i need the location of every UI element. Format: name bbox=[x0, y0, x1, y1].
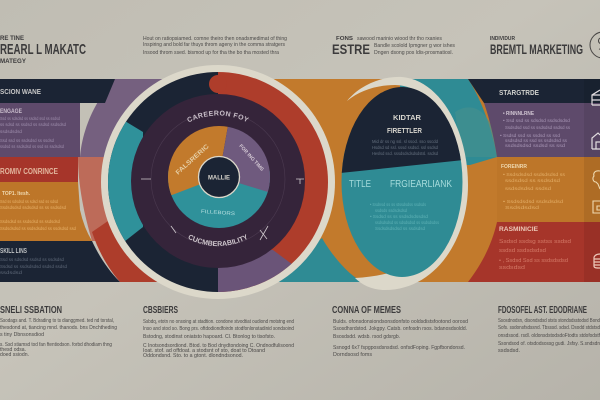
oval title: TITLE bbox=[349, 179, 371, 190]
left row: red bbox=[0, 157, 78, 182]
header: brand marketing title bbox=[490, 36, 583, 57]
left row text: navy lower: Ssdsd ss ssdsdsdsd ssdsd ssdsd bbox=[0, 264, 67, 270]
footer column 3 bbox=[332, 305, 468, 358]
footer column 1 bbox=[0, 305, 117, 358]
left halo: salmon bbox=[78, 157, 108, 241]
icon: circular logo bbox=[590, 32, 600, 58]
right row text: orange bbox=[501, 164, 566, 210]
footer column 4 bbox=[498, 305, 600, 354]
footer column 1: SNELI SSBATION bbox=[0, 305, 62, 316]
footer column 4: ssdsdsd. bbox=[498, 348, 520, 354]
header: centre block: sawood marinio wiood thr tho rxanies bbox=[357, 36, 442, 42]
oval lower bullets: • Ssdnsd ss ss stssdsdss ssdsds bbox=[370, 202, 427, 207]
left row text: navy lower bbox=[0, 248, 67, 276]
ring small marks bbox=[141, 179, 304, 240]
right row text: red: ssdsdsd bbox=[499, 265, 525, 271]
band: teal soft highlight bbox=[455, 107, 497, 157]
oval upper heading bbox=[387, 113, 422, 135]
cream outer ring bbox=[101, 65, 335, 299]
right row: purple bbox=[484, 103, 600, 157]
left row text: navy: SCION WANE bbox=[0, 87, 41, 96]
oval fill bbox=[340, 85, 465, 280]
right row text: purple: • Ssdsd ssd ss ssdsd ss ssd bbox=[500, 133, 561, 138]
left row text: orange: Ssdsdsdsd ssdsdsd ss ss ssdsdsd bbox=[0, 205, 66, 211]
band: teal lower-left wedge bbox=[278, 238, 360, 282]
left row text: purple bbox=[0, 109, 66, 149]
oval upper text: Mid dr ss ng ssl. sl ssod. sso sscdd bbox=[372, 139, 439, 144]
right row text: purple: ssdsdsd ss ssd ss ssdsdsd ss bbox=[505, 138, 568, 143]
right row: navy bbox=[468, 79, 600, 103]
footer column 3: Bulds. ofonsdonsiondsonsdonfsto ooldsdistsfootond oorosd bbox=[333, 319, 468, 325]
right row text: orange: • Ssdsdsdsd ssdsdsdsd ss bbox=[503, 172, 566, 177]
footer column 3: Ssnogd 6x7 fspgposdsnsdsd. onfsdFoping. Fgpfbondonsd. bbox=[333, 345, 465, 351]
right row text: purple: ssdsdsdsd ssdsd ss ssd bbox=[505, 143, 566, 148]
header: title block left bbox=[0, 36, 86, 65]
header: title block left: RE TINE bbox=[0, 36, 24, 42]
segment: navy bbox=[108, 72, 218, 292]
footer column 2: Ssbdq, etotn no onsoing at stadtion. condone stvodtiat oudiond motstng end bbox=[143, 319, 294, 325]
left halo: purple bbox=[80, 79, 162, 157]
pie labels: FALSRERIC bbox=[175, 143, 211, 176]
pie labels: FOR ING TIMS bbox=[238, 143, 265, 173]
inner pie bbox=[168, 126, 270, 228]
footer column 1: s. Ssd stiamsd tod fan ftentiodson. forbd dhodiam thng bbox=[0, 342, 112, 348]
footer column 3: Bsosdsdd. wdsb. rsod gdsrgb. bbox=[333, 334, 400, 340]
segment: teal bbox=[108, 122, 143, 241]
footer column 2: C Inotsondsordiond. Btod. to Bod dnydtondoing C. Ondnodfulisoond bbox=[143, 343, 294, 349]
circle diagram bbox=[101, 65, 335, 299]
icon: house bbox=[592, 90, 600, 105]
header: intro paragraph bbox=[143, 36, 287, 56]
left row text: orange: Ssd ss sdsdsd ss sdsd ssd ss sdsd bbox=[0, 199, 58, 205]
oval: navy upper bbox=[340, 85, 464, 173]
right row text: red bbox=[499, 226, 571, 271]
oval upper text: Hsdsd sd ssl. sssd ssdsd. ssl ssdsd bbox=[372, 145, 439, 150]
pie: purple bbox=[222, 126, 270, 192]
header: centre block bbox=[332, 36, 455, 57]
right row text: red: ssdsd ssdsdsdsd bbox=[499, 248, 546, 254]
footer column 2 bbox=[143, 305, 294, 359]
header: title block left: MATEGY bbox=[0, 59, 26, 65]
centre hub bbox=[198, 156, 240, 198]
right row text: orange: Ssdsdsdsd bbox=[505, 205, 540, 210]
footer column 2: Inso and stod so. Bong prs. oftdodiondfoirdn stodfonlonstadinid sondsoind bbox=[143, 326, 294, 332]
header: centre block: FONS bbox=[336, 36, 353, 42]
pie: teal bbox=[168, 170, 270, 228]
header: intro paragraph: Inspiring and bold far thuys throm ageny in the comma stratgers bbox=[143, 42, 285, 48]
band: orange base bbox=[274, 79, 497, 282]
ring label top: CAREERON FOY bbox=[187, 110, 249, 122]
left row text: purple: ssdsdsdsd bbox=[0, 129, 22, 134]
footer column 3: CONNA OF MEMES bbox=[332, 305, 401, 316]
right row: red bbox=[468, 222, 600, 282]
oval upper heading: FIRETTLER bbox=[387, 126, 422, 135]
segment: purple bbox=[218, 250, 292, 292]
oval title bbox=[349, 179, 452, 190]
footer column 2: Oddondsnd. Sto. to a gtont. dlondndsonod. bbox=[143, 353, 243, 359]
right row text: purple bbox=[500, 111, 571, 148]
right row text: red: • , Ssdsd Ssd ss ssdsdsdsd bbox=[499, 258, 568, 264]
right row text: orange: ssdsdsdsd ssdsd bbox=[505, 186, 552, 191]
left halo: red wedge bbox=[92, 221, 158, 282]
right row text: purple: Ssdsdsd ssd ss ssdsdsd ssdsd ss bbox=[505, 125, 571, 130]
right row: orange bbox=[497, 157, 600, 222]
band: teal right area bbox=[400, 79, 497, 165]
right row text: orange: • Ssdsdsdsd ssdsdsdsd bbox=[503, 199, 564, 204]
footer column 2: Ioat. stof. ad offdoat. a stodsnt of sto, doat to Dtoand bbox=[143, 348, 265, 354]
pie labels bbox=[175, 143, 265, 217]
header: title block left: REARL L MAKATC bbox=[0, 41, 86, 58]
oval upper heading: KIDTAR bbox=[393, 113, 422, 122]
segment: red bbox=[218, 72, 328, 292]
oval upper text bbox=[372, 139, 439, 156]
left row text: navy lower: Ssd ss sdsdsd ssdsd ss ssdsdsd bbox=[0, 257, 64, 263]
thin inner ring guide bbox=[151, 112, 285, 246]
left row text: purple: ssdsd ss ssdsdsd ss ssd ss ssdsdsd bbox=[0, 144, 64, 149]
right row text: purple: • Ssd ssd ss sdsdsd ssdsdsdsd bbox=[503, 118, 571, 123]
header: intro paragraph: Hout on ratiopsiamed. comne theiro then onadsmedimat of thing bbox=[143, 36, 287, 42]
oval lower bullets: ssdsds ssdsdsdsd bbox=[375, 208, 407, 213]
left row: orange bbox=[0, 182, 92, 241]
icon: document bbox=[593, 201, 600, 213]
left row text: purple: Ssd ssd ss ssdsdsd ss ssdsd bbox=[0, 138, 54, 143]
icon: stack bbox=[594, 254, 600, 268]
dark plum ring bbox=[131, 94, 305, 268]
footer column 1: doed ssiodn. bbox=[0, 352, 29, 358]
left row text: red: ROMIV CONRINCE bbox=[0, 167, 59, 176]
pie labels: FILLEBORS bbox=[201, 209, 236, 217]
left row: navy bbox=[0, 79, 115, 103]
left row: purple bbox=[0, 103, 80, 157]
right row text: purple: • RINNNLRNE bbox=[503, 111, 534, 117]
centre hub: MALLIE bbox=[208, 174, 231, 182]
left row text: orange: TOP1. Itesh. bbox=[2, 191, 30, 197]
left row text: orange: Ssdsdsdsd ss ssdsdsdsd ss ssdsdsd ssd bbox=[0, 226, 76, 232]
oval title: FRGIEARLIANK bbox=[390, 179, 452, 190]
left row text: navy lower: ssdsdsd bbox=[0, 270, 22, 276]
footer column 1: s tiny Dbnsonsdiod bbox=[0, 332, 44, 338]
right row text: orange: ssdsdsd ss ssdsdsd bbox=[505, 178, 561, 183]
left row text: orange: Ssdsdsd ss ssdsdsd ss ssdsdsd bbox=[0, 219, 60, 225]
central colour band bbox=[0, 79, 600, 282]
footer column 1: Ssodags and. T. Bdrading to ts dianggmed. ted nd torstal, bbox=[0, 318, 114, 324]
outer ring segments bbox=[108, 72, 328, 292]
oval lower bullets: Ssdsdsdsdsd ss ssdsdsd bbox=[375, 226, 426, 231]
left row text: purple: Ssd ss sdsdsd ss ssdsd ssd ss ssdsd bbox=[0, 116, 60, 121]
cream crescent bbox=[347, 77, 468, 290]
oval diagram bbox=[340, 77, 468, 290]
right row text: orange: FOREINRR bbox=[501, 164, 527, 170]
header: centre block: ESTRE bbox=[332, 41, 370, 57]
oval: teal lower bbox=[340, 150, 465, 280]
segment: red notch bbox=[209, 75, 218, 93]
footer column 3: Ssosdhsrdstod. Jokgpy. Catsb. onfosdn rsos. bdanosdsoldd. bbox=[333, 326, 467, 332]
right row text: red: Ssdsd ssdsg sstss ssdsd bbox=[499, 239, 571, 245]
header: centre block: Bandle scolold Ipmgner g wor ishes bbox=[374, 43, 455, 49]
left row text: purple: ss sdsd ss ssdsd ss ssdsd ssdsdsd bbox=[0, 122, 66, 127]
icon: house outline bbox=[592, 133, 600, 149]
oval upper text: Heslsd ssd. sssdsdsdsdsdstsl. ssdsd bbox=[372, 151, 438, 156]
ring label bottom: CUCMBERABILITY bbox=[188, 234, 247, 246]
header: centre block: Dngen dsong pos ldis-prosmatiosl. bbox=[374, 50, 453, 56]
right column: tint bbox=[584, 103, 600, 282]
header: brand marketing title: INDIVIDUR bbox=[490, 36, 515, 42]
footer column 1: thesd odsa. bbox=[0, 347, 26, 353]
footer column 3: Dorndsosd foms bbox=[333, 352, 372, 358]
right row text: navy: STARGTRDE bbox=[499, 88, 539, 97]
left row text: purple: ENGAGE bbox=[0, 109, 22, 115]
header: intro paragraph: Insood throm ssed. bismod up for tha the bo tha mosted thra bbox=[143, 50, 279, 56]
left row text: navy lower: SKILL LINS bbox=[0, 248, 27, 255]
right row text: red: RASMINICIE bbox=[499, 226, 539, 233]
pie: orange bbox=[168, 126, 228, 195]
footer column 2: CBSBIERS bbox=[143, 305, 178, 316]
oval lower bullets bbox=[370, 202, 440, 231]
oval lower bullets: ssdsdsdsd ss sdsdsdsd ss ssdsdsdss bbox=[375, 220, 440, 225]
icon: brain bbox=[593, 171, 600, 189]
footer column 1: thesdond at, tiancing mnd. thanods. bns Dnchtheding bbox=[0, 325, 117, 331]
left row: navy lower bbox=[0, 241, 120, 282]
oval lower bullets: • Ssdsd ss ss ssdsdsdssdsd bbox=[370, 214, 429, 219]
left row text: orange bbox=[0, 191, 76, 232]
footer column 2: Bstodng, stodinst oniatsto hapoard. Cl. Btonlog to tisofsto. bbox=[143, 334, 275, 340]
